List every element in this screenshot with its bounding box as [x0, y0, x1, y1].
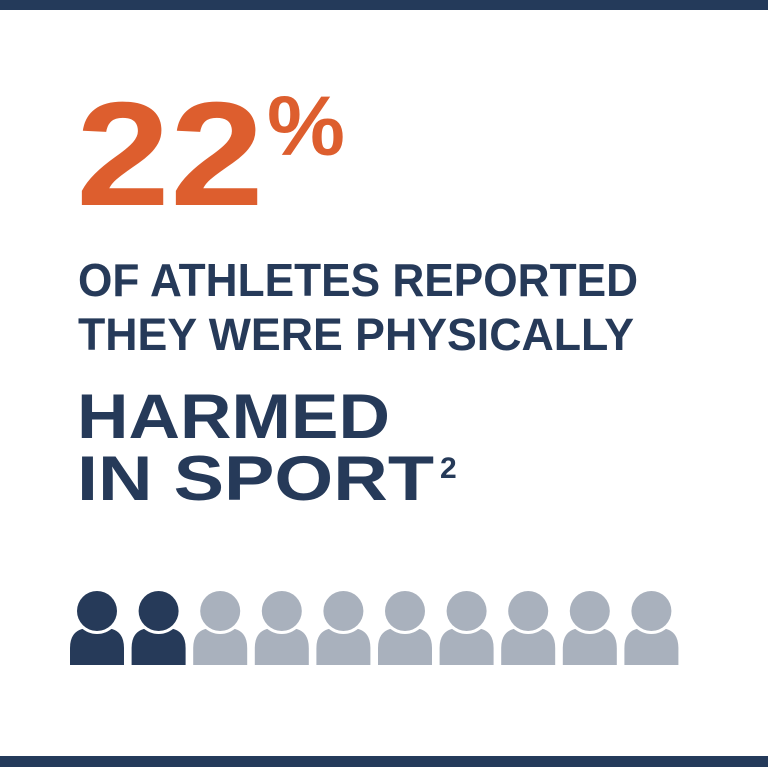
- headline stat: 22%: %: [267, 79, 345, 173]
- description text: OF ATHLETES REPORTED: [78, 254, 638, 306]
- description text: THEY WERE PHYSICALLY: [78, 309, 634, 360]
- emphasis text: 2: [440, 452, 457, 485]
- emphasis text: [77, 382, 457, 514]
- pictogram: 2 of 10 athletes: [70, 588, 678, 665]
- description text: [78, 254, 638, 360]
- emphasis text: HARMED: [77, 382, 390, 452]
- headline stat: 22%: [76, 72, 345, 237]
- emphasis text: IN SPORT: [77, 444, 434, 514]
- top bar: [0, 0, 768, 10]
- bottom bar: [0, 756, 768, 767]
- headline stat: 22%: 22: [76, 72, 264, 237]
